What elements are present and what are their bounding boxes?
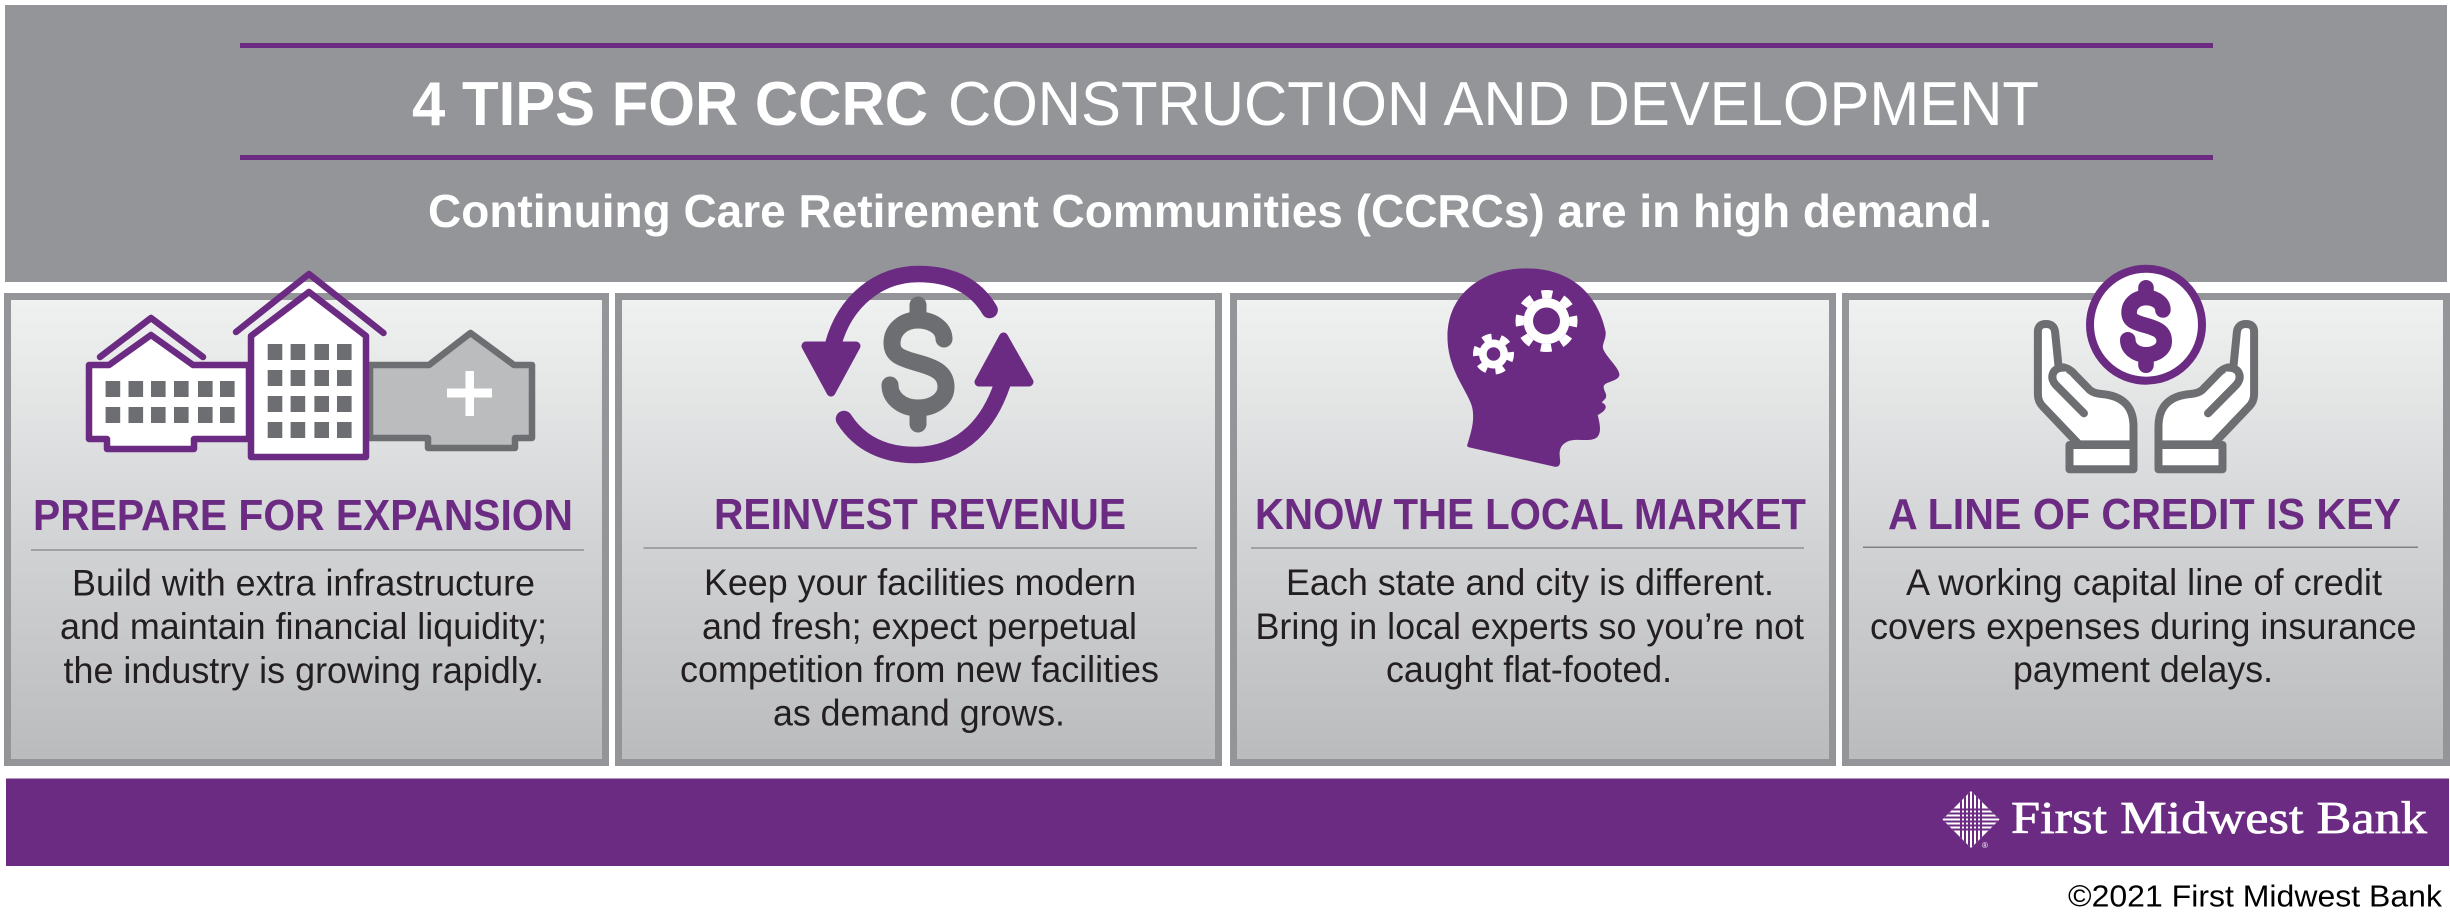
heading: A LINE OF CREDIT IS KEY: [1888, 491, 2401, 539]
body text: competition from new facilities: [680, 648, 1159, 690]
bank name: First Midwest Bank: [2011, 792, 2427, 843]
body text: [680, 561, 1159, 734]
icon: dollar with circular arrows: [806, 274, 1029, 455]
body text: and maintain financial liquidity;: [60, 605, 547, 647]
logo mark: ®: [1982, 841, 1988, 850]
footer band: [6, 778, 2449, 866]
icon: head with gears: [1447, 268, 1619, 467]
title: CONSTRUCTION AND DEVELOPMENT: [948, 70, 2039, 139]
body text: [1256, 561, 1805, 690]
body text: and fresh; expect perpetual: [702, 605, 1137, 647]
body text: covers expenses during insurance: [1870, 605, 2416, 647]
header banner: [5, 5, 2447, 282]
body text: [60, 562, 547, 691]
body text: A working capital line of credit: [1906, 561, 2383, 603]
body text: Each state and city is different.: [1286, 561, 1774, 603]
logo mark: [1942, 790, 2000, 850]
panel: prepare for expansion: [8, 274, 606, 762]
title: [412, 70, 2039, 139]
title: 4 TIPS FOR CCRC: [412, 70, 928, 139]
heading: PREPARE FOR EXPANSION: [33, 492, 573, 540]
copyright: ©2021 First Midwest Bank: [2068, 878, 2443, 914]
body text: caught flat-footed.: [1386, 648, 1672, 690]
subtitle: Continuing Care Retirement Communities (CCRCs) are in high demand.: [428, 185, 1992, 237]
body text: [1870, 561, 2416, 690]
icon: hands holding coin: [2038, 269, 2254, 469]
panel: reinvest revenue: [618, 274, 1218, 762]
icon: buildings: [89, 274, 532, 457]
heading: KNOW THE LOCAL MARKET: [1255, 491, 1806, 539]
body text: Build with extra infrastructure: [72, 562, 535, 604]
body text: payment delays.: [2013, 648, 2273, 690]
body text: the industry is growing rapidly.: [64, 649, 544, 691]
body text: Keep your facilities modern: [704, 561, 1136, 603]
panel: know the local market: [1234, 268, 1832, 762]
body text: Bring in local experts so you’re not: [1256, 605, 1805, 647]
body text: as demand grows.: [773, 692, 1065, 734]
heading: REINVEST REVENUE: [714, 491, 1126, 539]
panel: a line of credit is key: [1846, 269, 2446, 762]
